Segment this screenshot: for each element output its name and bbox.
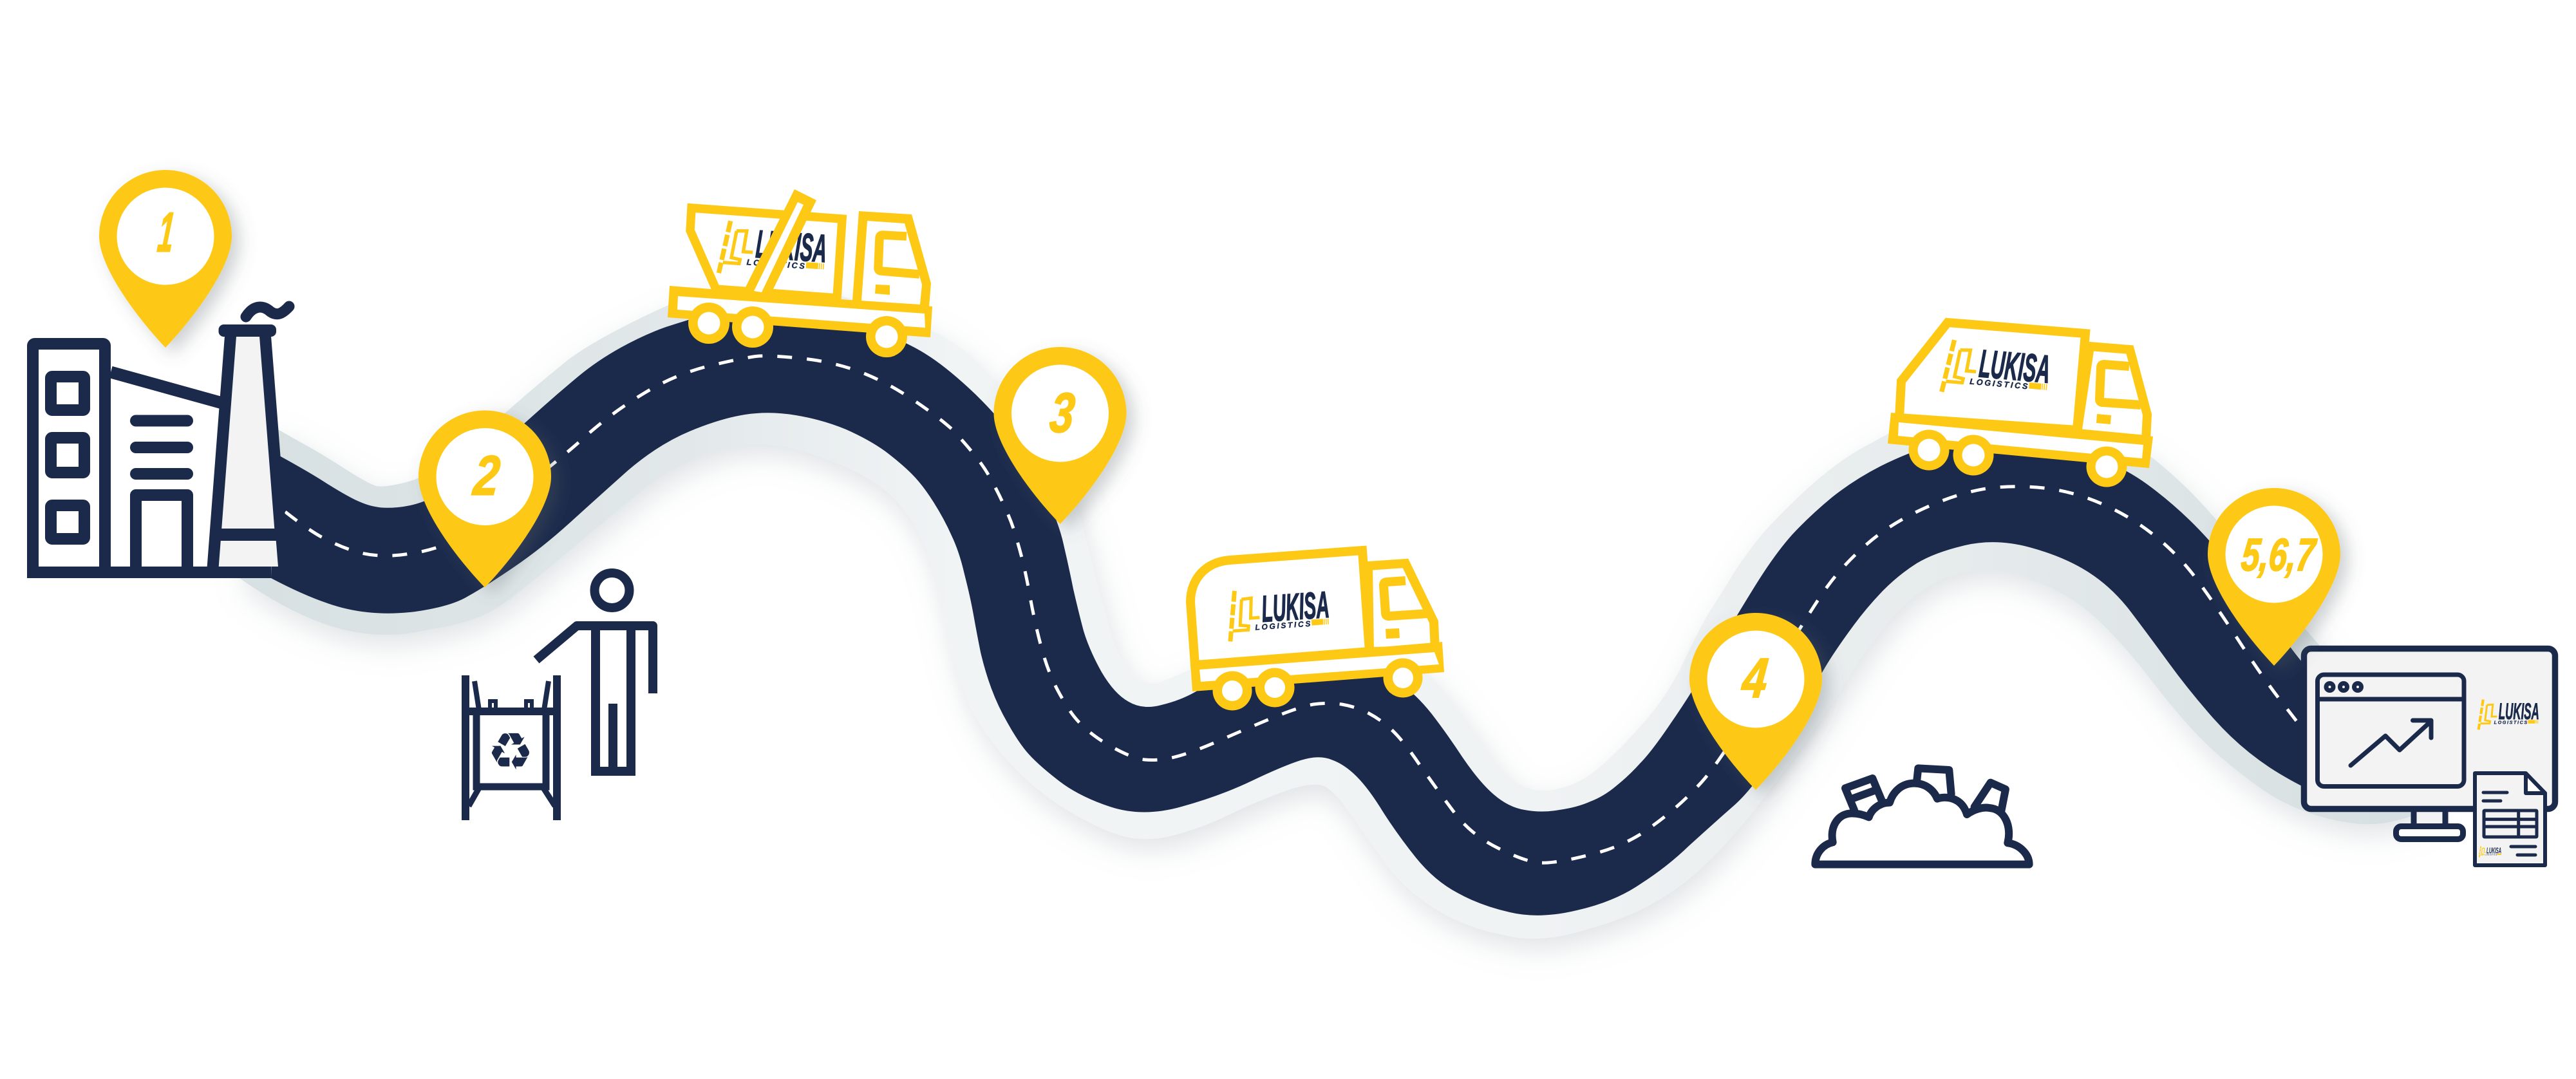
truck 1: skip loader [668,189,932,357]
icon: factory [27,306,289,572]
logo on document [2479,846,2501,858]
logo on refuse truck: LOGISTICS [1970,377,2029,391]
map pin 5,6,7: 5,6,7 [2239,530,2319,581]
icon: recycling bag in frame [465,675,557,820]
icon: person throwing waste [536,573,653,771]
road centre dashes [285,356,2300,863]
road backing band [240,283,2421,939]
map pin 2 [418,411,551,587]
logo on refuse truck [1942,339,2052,401]
map pin 2: 2 [470,445,503,507]
map pin 1: 1 [155,202,177,263]
logo on box truck: LUKISA [1260,584,1331,630]
truck 1: skip loader: LUKISA [755,222,829,270]
icon: waste pile [1815,768,2029,865]
map pin 3 [994,347,1127,524]
map pin 1 [99,170,232,348]
logo on box truck [1227,584,1331,641]
logo on document: LOGISTICS [2485,853,2497,856]
icon: computer monitor with chart [2304,649,2555,840]
road surface [271,306,2344,915]
logo on monitor: LOGISTICS [2494,719,2527,725]
map pin 3: 3 [1048,382,1078,444]
truck 3: refuse truck [1888,323,2153,487]
logo on box truck: LOGISTICS [1255,619,1311,632]
map pin 4: 4 [1738,647,1771,709]
logo on skip: LOGISTICS [746,258,805,271]
chart arrow [2351,720,2431,765]
map pin 5,6,7 [2208,488,2340,666]
truck 3: refuse truck: LUKISA [1978,341,2052,391]
icon: recycling symbol: ♻ [487,722,534,782]
icon: report document [2475,773,2545,865]
logo on monitor [2479,699,2539,729]
icon: report document: LUKISA [2487,846,2501,856]
truck 2: rounded box truck [1190,550,1444,711]
logo on skip [719,220,829,281]
map pin 4 [1689,613,1822,790]
